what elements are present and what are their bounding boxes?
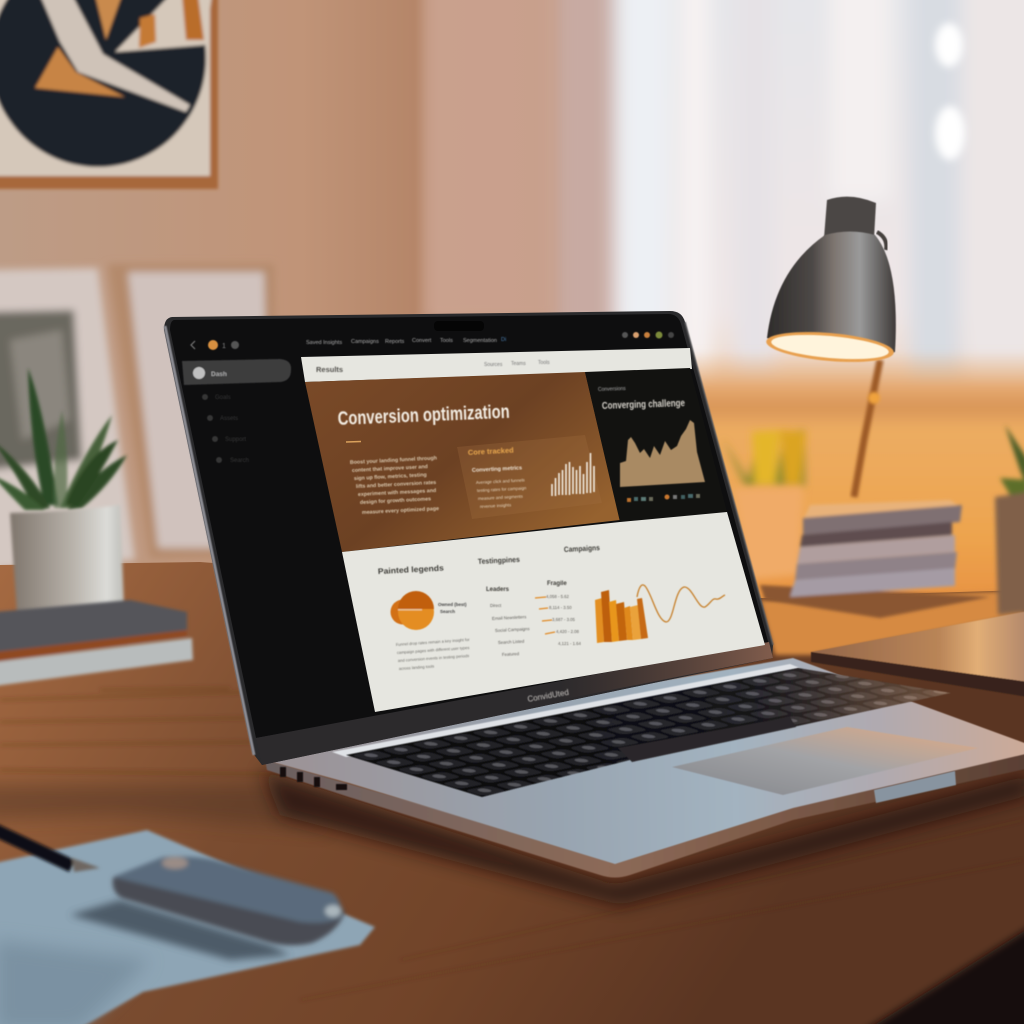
phone glint (325, 905, 341, 917)
orange bar chart (595, 590, 648, 643)
middle list: Search Listed (498, 639, 525, 645)
phone shadow (70, 900, 290, 960)
header text: Tools (538, 360, 550, 366)
hero paragraph: Boost your landing funnel through (350, 455, 437, 466)
desk front dark edge (860, 925, 1024, 1024)
notebook right (811, 611, 1024, 697)
card text: Average click and funnels (476, 477, 525, 485)
hero panel (305, 372, 620, 552)
card bar chart (552, 453, 594, 496)
hero paragraph: sign up flow, metrics, testing (354, 472, 427, 482)
dark analytics panel (585, 368, 727, 522)
active label: Dash (211, 371, 227, 378)
top-right status icons (622, 332, 674, 338)
lamp cap (824, 197, 876, 238)
cream band (40, 0, 190, 112)
paper shadow tint (0, 940, 150, 1024)
sidebar items: Search (230, 458, 249, 464)
pie caption: and conversion events in testing periods (398, 653, 469, 663)
lamp light (765, 327, 895, 367)
space bar (618, 717, 796, 762)
top navigation (306, 337, 506, 346)
top-left controls: 1 (222, 343, 226, 350)
right dark wedge (122, 45, 205, 102)
sidebar items: Goals (215, 395, 231, 401)
lid back edge (164, 311, 773, 765)
value list with bars: 3,687 - 3.05 (552, 617, 576, 622)
pie caption: Funnel drop rates remain a key insight for (396, 637, 470, 647)
lid left silver edge (165, 326, 254, 755)
middle list: Social Campaigns (495, 626, 530, 633)
middle list: Leaders (486, 587, 510, 593)
hinge strip (256, 642, 773, 765)
laptop (164, 311, 1024, 878)
card title: Core tracked (468, 446, 514, 457)
analytics small label: Conversions (598, 386, 626, 393)
keyboard well highlight (332, 664, 800, 757)
hero paragraph (350, 455, 439, 516)
top navigation: Convert (412, 338, 432, 344)
top navigation: Segmentation (463, 338, 497, 344)
right side plant and pot (995, 425, 1024, 615)
pie legend (438, 602, 467, 614)
potted plant left (0, 368, 127, 615)
hero heading: Conversion optimization (337, 401, 510, 430)
art paper (0, 0, 210, 176)
hinge warm reflection (560, 642, 773, 700)
front notch (874, 771, 956, 803)
art frame (0, 0, 218, 189)
header text: Sources (484, 362, 503, 368)
top navigation: Saved Insights (306, 340, 342, 346)
hero paragraph: design for growth outcomes (360, 496, 431, 506)
paper on desk (0, 830, 375, 1024)
stack of books left (0, 600, 193, 686)
lower column headings: Campaigns (564, 543, 600, 554)
lower column headings (378, 543, 600, 576)
hero paragraph: content that improve user and (352, 464, 428, 474)
value list with bars: Fragile (547, 581, 567, 587)
hero paragraph: experiment with messages and (358, 488, 436, 498)
value list with bars: 8,114 - 3.50 (549, 605, 572, 610)
header text (316, 360, 550, 374)
pen (0, 830, 100, 872)
keyboard (346, 668, 951, 797)
desk surface (0, 562, 1024, 1024)
lower column headings: Painted legends (378, 564, 445, 576)
middle list: Featured (502, 651, 520, 657)
brand label: ConvidUted (527, 688, 570, 704)
header text: Results (316, 365, 343, 374)
active icon (193, 367, 205, 379)
dark circle (0, 0, 206, 167)
pie caption: campaign pages with different user types (397, 645, 470, 655)
middle list: Direct (490, 603, 502, 608)
plant pot (10, 505, 124, 615)
phone screen (113, 856, 341, 923)
hero accent line (346, 440, 361, 443)
card text: revenue insights (480, 502, 511, 509)
laptop base (265, 658, 1024, 878)
pie chart (390, 591, 434, 630)
lamp joint (868, 392, 880, 404)
books under lamp (760, 500, 990, 618)
top-left controls (191, 340, 239, 350)
card text: testing rates for campaign (477, 485, 527, 493)
value list with bars: 4,420 - 2.08 (556, 629, 580, 634)
trackpad (672, 727, 978, 795)
windowsill warm glow (690, 350, 1024, 635)
hero paragraph: measure every optimized page (362, 506, 439, 516)
orange line chart (637, 585, 725, 622)
wall curtain fold (424, 0, 554, 315)
framed abstract art (0, 0, 218, 189)
base top surface (265, 658, 1024, 864)
value list with bars (535, 581, 582, 646)
header text: Teams (511, 361, 526, 367)
yellow plant and pot (722, 430, 806, 580)
camera notch (434, 321, 484, 331)
middle list (486, 587, 530, 657)
active sidebar pill (182, 359, 291, 385)
desk lamp (765, 197, 896, 497)
orange triangle (35, 47, 125, 97)
warm desk area right of laptop (760, 590, 1024, 655)
white header strip (301, 348, 692, 382)
pie caption (396, 637, 470, 671)
lamp shade (767, 232, 896, 356)
phone (113, 856, 345, 945)
phone highlight (162, 857, 188, 869)
sidebar items: Support (225, 437, 246, 443)
card text: measure and segments (478, 494, 523, 501)
screen (182, 321, 765, 712)
pie caption: across landing tools (399, 664, 434, 671)
orange stripes (95, 0, 122, 40)
chart legend (627, 494, 700, 502)
top navigation: Tools (440, 338, 453, 344)
leaning picture frames (0, 264, 278, 570)
window bright panes (935, 23, 965, 160)
sidebar (182, 359, 291, 464)
tray (760, 585, 990, 618)
value list with bars: 4,058 - 5.62 (546, 594, 570, 599)
top paper wedge (115, 0, 212, 52)
glass card (457, 435, 602, 519)
lower white panel (342, 512, 765, 712)
top navigation: Reports (385, 339, 405, 345)
lamp arm (854, 360, 880, 497)
analytics heading: Converging challenge (602, 398, 685, 412)
laptop shadow on desk (262, 770, 1024, 905)
background wall (0, 0, 1024, 620)
pie legend: Search (440, 609, 455, 614)
window with sheer curtains (556, 0, 1024, 430)
lid right silver edge (685, 322, 773, 645)
yellow plant pot (733, 487, 803, 580)
base front lip (265, 750, 1024, 878)
pie legend: Owned (best) (438, 602, 467, 607)
card text (476, 477, 527, 509)
phone body (113, 857, 345, 945)
top navigation: Di (501, 337, 506, 343)
top navigation: Campaigns (351, 339, 379, 345)
card subtitle: Converting metrics (472, 465, 522, 474)
lower column headings: Testingpines (478, 555, 520, 566)
lid bezel (170, 314, 769, 738)
hero paragraph: lifts and better conversion rates (356, 480, 436, 490)
top book (803, 500, 962, 520)
wood grain (0, 688, 1024, 1000)
tan area bar chart (620, 420, 705, 487)
lamp handle (877, 232, 886, 250)
sidebar items: Assets (220, 416, 238, 422)
sidebar items (202, 394, 249, 464)
desk dark band above paper (0, 785, 330, 830)
value list with bars: 4,121 - 1.64 (558, 641, 582, 646)
middle list: Email Newsletters (492, 614, 526, 621)
ports (280, 767, 347, 790)
